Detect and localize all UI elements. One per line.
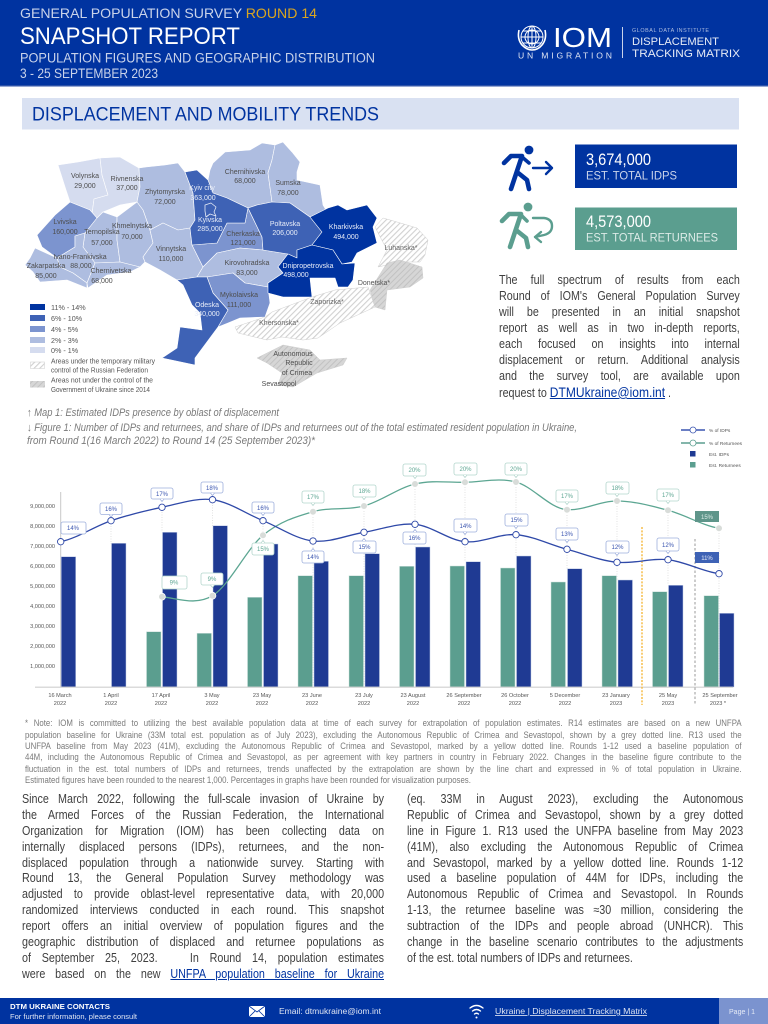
returnee percentage callouts: 20%: [510, 467, 523, 473]
map legend: 6% - 10%: [51, 314, 83, 323]
dotted leader lines: [111, 482, 719, 687]
IDP bars: [61, 526, 734, 687]
oblast labels: 88,000: [70, 263, 92, 270]
y axis: 9,000,000: [30, 504, 55, 510]
oblast labels: Cherkaska: [226, 231, 260, 238]
oblast labels: Volynska: [71, 173, 99, 180]
map and figure captions: ↓ Figure 1: Number of IDPs and returnees, and share of IDPs and returnees out of the total estimated resident population in Ukraine,: [27, 422, 577, 434]
IOM DTM logo: [518, 22, 741, 60]
text block: extrapolation note: UNFPA baseline from May 2023 (41M), excluding the Autonomous Republic of Crimea and Sevastopol, marked by a yellow dotted line. Rounds 1-12 used a baseline population of: [25, 741, 742, 751]
map legend: [30, 303, 155, 394]
returnee percentage callouts: 9%: [208, 577, 217, 583]
map of Ukraine: IDPs by oblast: [25, 142, 428, 388]
text block: methodology right column: change in the baseline scenario contributes to the adjustments: [407, 935, 743, 949]
oblast labels: Khmelnytska: [112, 223, 152, 230]
returnee percentage callouts: 15%: [701, 515, 714, 521]
oblast labels: 72,000: [154, 199, 176, 206]
IDP percentage callouts: 16%: [257, 506, 270, 512]
oblast labels: Autonomous: [273, 351, 313, 358]
text block: methodology right column: line in Figure 1. R13 used the UNFPA baseline from May 2023: [407, 824, 743, 838]
y axis: 3,000,000: [30, 624, 55, 630]
oblast labels: Vinnytska: [156, 246, 186, 253]
x axis date labels: 3 May: [204, 693, 220, 699]
returnee percentage callouts: 15%: [257, 547, 270, 553]
icon: returnee runner with return arrow: [502, 203, 552, 247]
x axis date labels: 2022: [256, 701, 268, 707]
text block: methodology right column: (41M), also excluding the Autonomous Republic of Crimea: [407, 840, 743, 854]
IDP percentage callouts: 13%: [561, 532, 574, 538]
oblast labels: Zhytomyrska: [145, 189, 185, 196]
Kyiv city outline: [205, 203, 216, 217]
x axis date labels: 16 March: [48, 693, 72, 699]
map legend: 4% - 5%: [51, 325, 79, 334]
oblast labels: 110,000: [159, 256, 183, 263]
oblast labels: 363,000: [190, 195, 216, 202]
returnee percentage callouts: 17%: [307, 495, 320, 501]
text block: methodology right column: of the est. total numbers of IDPs and returnees.: [407, 951, 633, 965]
IOM DTM logo: UN MIGRATION: [518, 50, 612, 60]
icon: wifi: [470, 1006, 483, 1018]
returnee percentage callouts: 20%: [459, 467, 472, 473]
chart legend: % of Returnees: [709, 441, 743, 447]
text block: methodology right column: Autonomous Republic of Crimea and Sevastopol. In Rounds: [407, 887, 743, 901]
chart legend: % of IDPs: [709, 428, 731, 434]
oblast labels: 37,000: [116, 185, 138, 192]
x axis date labels: 26 October: [501, 693, 529, 699]
text block: methodology right column: [407, 792, 744, 965]
map legend: 0% - 1%: [51, 346, 79, 355]
text block: survey results summary: [499, 273, 740, 400]
x axis date labels: 23 June: [302, 693, 322, 699]
text block: methodology left column: adjusted to provide oblast-level representative data, with 20,000: [22, 887, 384, 901]
returnee percentage callouts: 18%: [611, 486, 624, 492]
icon: envelope: [249, 1006, 265, 1017]
map legend: control of the Russian Federation: [51, 366, 148, 374]
IDP share line: [61, 499, 719, 574]
oblast labels: [27, 169, 418, 388]
text block: survey results summary: and the survey tool, are available upon: [499, 369, 740, 383]
map legend: Areas not under the control of the: [51, 376, 153, 384]
x axis date labels: 2023: [610, 701, 622, 707]
stat box: total IDPs: 3,674,000: [586, 151, 651, 169]
text block: extrapolation note: * Note: IOM is committed to utilizing the best available population data at time of each survey for extrapolation of population estimates. R14 estimates are based on a new UNFPA: [25, 718, 742, 728]
x axis date labels: 2022: [458, 701, 470, 707]
IOM DTM logo: GLOBAL DATA INSTITUTE: [632, 28, 709, 34]
x axis date labels: 1 April: [103, 693, 119, 699]
returnee share line: [162, 480, 719, 601]
oblast labels: Chernivetska: [91, 268, 132, 275]
text block: methodology left column: report offers an initial overview of population figures and the: [22, 919, 384, 933]
y axis: 5,000,000: [30, 584, 55, 590]
report title: SNAPSHOT REPORT: [20, 23, 240, 50]
IOM DTM logo: TRACKING MATRIX: [632, 48, 741, 60]
oblast labels: Dnipropetrovska: [283, 263, 334, 270]
map and figure captions: ↑ Map 1: Estimated IDPs presence by oblast of displacement: [27, 407, 280, 419]
oblast labels: 285,000: [197, 226, 223, 233]
text block: survey results summary: report as well as in two in-depth reports,: [499, 321, 740, 335]
footer bar: [0, 998, 768, 1024]
y axis: [30, 492, 61, 687]
IDP percentage callouts: 15%: [358, 545, 371, 551]
IDP percentage callouts: 14%: [307, 555, 320, 561]
text block: methodology left column: displaced population through a nationwide survey. Starting with: [22, 856, 384, 870]
returnee percentage callouts: 17%: [662, 493, 675, 499]
IDP percentage callouts: 18%: [206, 486, 219, 492]
chart legend: Est. IDPs: [709, 452, 730, 458]
IDP percentage callouts: 14%: [459, 524, 472, 530]
IOM DTM logo: IOM: [553, 22, 612, 53]
oblast labels: 340,000: [194, 311, 220, 318]
stat box: total returnees: 4,573,000: [586, 213, 651, 231]
oblast labels: Rivnenska: [111, 176, 143, 183]
occupied areas: [235, 218, 428, 387]
map legend: Areas under the temporary military: [51, 356, 155, 366]
oblast labels: 206,000: [272, 230, 298, 237]
oblast fills: [58, 158, 108, 218]
y axis: 2,000,000: [30, 644, 55, 650]
survey round line: GENERAL POPULATION SURVEY ROUND 14: [20, 5, 317, 21]
map legend: 2% - 3%: [51, 336, 79, 345]
oblast labels: 494,000: [333, 234, 359, 241]
IDP percentage callouts: [61, 482, 719, 563]
returnee percentage callouts: 20%: [408, 468, 421, 474]
x axis date labels: 2022: [358, 701, 370, 707]
text block: methodology right column: 1-13, the returnee baseline was ≈30 million, considering the: [407, 903, 743, 917]
oblast labels: 121,000: [230, 240, 256, 247]
x axis date labels: 23 August: [401, 693, 426, 699]
oblast labels: Odeska: [195, 302, 219, 309]
oblast labels: 70,000: [121, 234, 143, 241]
map and figure captions: from Round 1(16 March 2022) to Round 14 (25 September 2023)*: [27, 435, 316, 447]
map legend: 11% - 14%: [51, 303, 86, 312]
returnee bars: [146, 566, 718, 687]
x axis date labels: 2022: [306, 701, 318, 707]
text block: methodology right column: subtraction of the IDPs and people abroad (UNHCR). This: [407, 919, 743, 933]
page number: Page | 1: [729, 1007, 755, 1016]
baseline change markers: [641, 527, 643, 705]
footer DTM link: Ukraine | Displacement Tracking Matrix: [495, 1006, 648, 1016]
footer bar: For further information, please consult: [10, 1012, 138, 1021]
oblast labels: Lvivska: [53, 219, 77, 226]
footer contacts: DTM UKRAINE CONTACTS: [10, 1002, 110, 1011]
stat box: total returnees: [575, 208, 737, 250]
text block: methodology left column: Organization for Migration (IOM) has been collecting data on: [22, 824, 384, 838]
oblast labels: Kharkivska: [329, 224, 363, 231]
chart legend: Est. Returnees: [709, 463, 741, 469]
oblast labels: 78,000: [277, 190, 299, 197]
oblast labels: Luhanska*: [384, 245, 418, 252]
oblast labels: Donetska*: [358, 280, 390, 287]
text block: methodology left column: geographic distribution of displaced and returnee populations as: [22, 935, 384, 949]
oblast labels: 68,000: [91, 278, 113, 285]
oblast labels: Poltavska: [270, 221, 300, 228]
x axis date labels: 25 May: [659, 693, 677, 699]
footer email: Email: dtmukraine@iom.int: [279, 1007, 382, 1016]
combo chart: IDPs and returnees: [30, 463, 738, 707]
oblast labels: 160,000: [52, 229, 78, 236]
x axis date labels: 5 December: [550, 693, 580, 699]
section heading band: DISPLACEMENT AND MOBILITY TRENDS: [32, 104, 379, 126]
text block: methodology right column: Republic of Crimea and Sevastopol, shown by a grey dotted: [407, 808, 743, 822]
oblast labels: Chernihivska: [225, 169, 265, 176]
section heading band: [22, 98, 739, 130]
text block: methodology right column: used a baseline population of 44M for IDPs, including the: [407, 871, 743, 885]
oblast labels: 29,000: [74, 183, 96, 190]
map and figure captions: [27, 407, 577, 447]
x axis date labels: [48, 693, 738, 707]
text block: methodology right column: (eq. 33M in August 2023), excluding the Autonomous: [407, 792, 743, 806]
IDP percentage callouts: 12%: [662, 543, 675, 549]
text block: extrapolation note: fluctuation in the est. total numbers of IDPs and returnees, trends unaffected by the extrapolation are shown by the line chart and expressed in % of total population in Ukraine.: [25, 764, 742, 774]
oblast labels: 111,000: [227, 302, 251, 309]
text block: survey results summary: The full spectrum of results from each: [499, 273, 740, 287]
x axis date labels: 2022: [559, 701, 571, 707]
returnee percentage callouts: 18%: [358, 489, 371, 495]
x axis date labels: 2023 *: [710, 701, 727, 707]
text block: extrapolation note: 44M, including the Autonomous Republic of Crimea and Sevastopol, as per agreement with key partners in country in February 2022. Changes in the baseline figure contribute to the: [25, 752, 742, 762]
IDP percentage callouts: 12%: [611, 545, 624, 551]
text block: methodology left column: Since March 2022, following the full-scale invasion of Ukraine by: [22, 792, 384, 806]
icon: UN globe: [518, 26, 546, 50]
x axis date labels: 2022: [54, 701, 66, 707]
x axis date labels: 23 May: [253, 693, 271, 699]
IDP percentage callouts: 16%: [408, 536, 421, 542]
oblast labels: 498,000: [283, 272, 309, 279]
x axis date labels: 2022: [155, 701, 167, 707]
text block: extrapolation note: [25, 718, 742, 785]
oblast labels: 83,000: [236, 270, 258, 277]
returnee percentage callouts: 17%: [561, 494, 574, 500]
y axis: 7,000,000: [30, 544, 55, 550]
IDP percentage callouts: 15%: [510, 518, 523, 524]
x axis date labels: 2022: [407, 701, 419, 707]
x axis date labels: 23 July: [355, 693, 373, 699]
x axis date labels: 2022: [509, 701, 521, 707]
returnee markers: [159, 479, 722, 600]
text block: methodology left column: of September 25, 2023. In Round 14, population estimates: [22, 951, 384, 965]
IDP percentage callouts: 16%: [105, 507, 118, 513]
y axis: 4,000,000: [30, 604, 55, 610]
returnee percentage callouts: [162, 463, 719, 589]
text block: methodology left column: were based on the new UNFPA population baseline for Ukraine: [22, 967, 384, 981]
oblast labels: 57,000: [91, 240, 113, 247]
oblast labels: Kirovohradska: [225, 260, 269, 267]
returnee percentage callouts: 9%: [170, 580, 179, 586]
text block: survey results summary: request to DTMUkraine@iom.int .: [499, 384, 671, 400]
oblast labels: Zakarpatska: [27, 263, 65, 270]
IDP percentage callouts: 17%: [156, 492, 169, 498]
text block: extrapolation note: population baseline for Ukraine (33M total est. population as of July 2023), excluding the Autonomous Republic of Crimea and Sevastopol, shown by a grey dotted line. R13 used the: [25, 730, 742, 740]
stat box: total IDPs: [575, 144, 737, 188]
icon: IDP runner with arrow: [504, 146, 552, 189]
text block: survey results summary: will be presented in an initial snapshot: [499, 305, 740, 319]
IDP percentage callouts: 11%: [701, 556, 713, 562]
text block: survey results summary: Round of IOM's General Population Survey: [499, 289, 740, 303]
stat box: total IDPs: EST. TOTAL IDPS: [586, 168, 677, 182]
text block: methodology right column: and Sevastopol, marked by a yellow dotted line. Rounds 1-12: [407, 856, 743, 870]
text block: methodology left column: Round 13, the General Population Survey methodology was: [22, 871, 384, 885]
x axis date labels: 25 September: [702, 693, 738, 699]
IDP percentage callouts: 14%: [67, 526, 80, 532]
oblast labels: Kyivska: [198, 217, 222, 224]
oblast labels: Republic: [285, 360, 313, 367]
oblast labels: Sevastopol: [262, 381, 297, 388]
text block: methodology left column: randomized interviews conducted in each round. This snapshot: [22, 903, 384, 917]
oblast labels: 68,000: [234, 178, 256, 185]
chart legend: [681, 427, 743, 469]
text block: survey results summary: each focused on insights into internal: [499, 337, 740, 351]
y axis: 8,000,000: [30, 524, 55, 530]
x axis date labels: 17 April: [152, 693, 170, 699]
oblast labels: Zaporizka*: [310, 299, 344, 306]
map legend: Government of Ukraine since 2014: [51, 385, 150, 394]
text block: survey results summary: displacement or return. Additional analysis: [499, 353, 740, 367]
y axis: 1,000,000: [30, 664, 55, 670]
stat box: total returnees: EST. TOTAL RETURNEES: [586, 230, 718, 244]
IDP markers: [58, 496, 722, 577]
subtitle: POPULATION FIGURES AND GEOGRAPHIC DISTRIBUTION: [20, 50, 375, 66]
oblast labels: Khersonska*: [259, 320, 299, 327]
IOM DTM logo: DISPLACEMENT: [632, 36, 719, 48]
oblast labels: Ivano-Frankivska: [53, 254, 107, 261]
header banner: [0, 0, 768, 86]
oblast labels: Mykolaivska: [220, 292, 258, 299]
x axis date labels: 2022: [105, 701, 117, 707]
text block: methodology left column: internally displaced persons (IDPs), returnees, and the non-: [22, 840, 384, 854]
oblast labels: Sumska: [275, 180, 301, 187]
text block: methodology left column: the Armed Forces of the Russian Federation, the International: [22, 808, 384, 822]
oblast labels: Kyiv city: [189, 185, 215, 192]
oblast labels: of Crimea: [282, 370, 312, 377]
text block: methodology left column: [22, 792, 384, 981]
x axis date labels: 23 January: [602, 693, 630, 699]
x axis date labels: 2023: [662, 701, 674, 707]
x axis date labels: 2022: [206, 701, 218, 707]
oblast labels: Ternopilska: [84, 229, 120, 236]
oblast labels: 85,000: [35, 273, 57, 280]
x axis date labels: 26 September: [446, 693, 482, 699]
text block: extrapolation note: Estimated figures have been rounded to the nearest 1,000. Percentages in graphs have been rounded for visualization purposes.: [25, 775, 471, 785]
survey dates: 3 - 25 SEPTEMBER 2023: [20, 66, 158, 81]
y axis: 6,000,000: [30, 564, 55, 570]
